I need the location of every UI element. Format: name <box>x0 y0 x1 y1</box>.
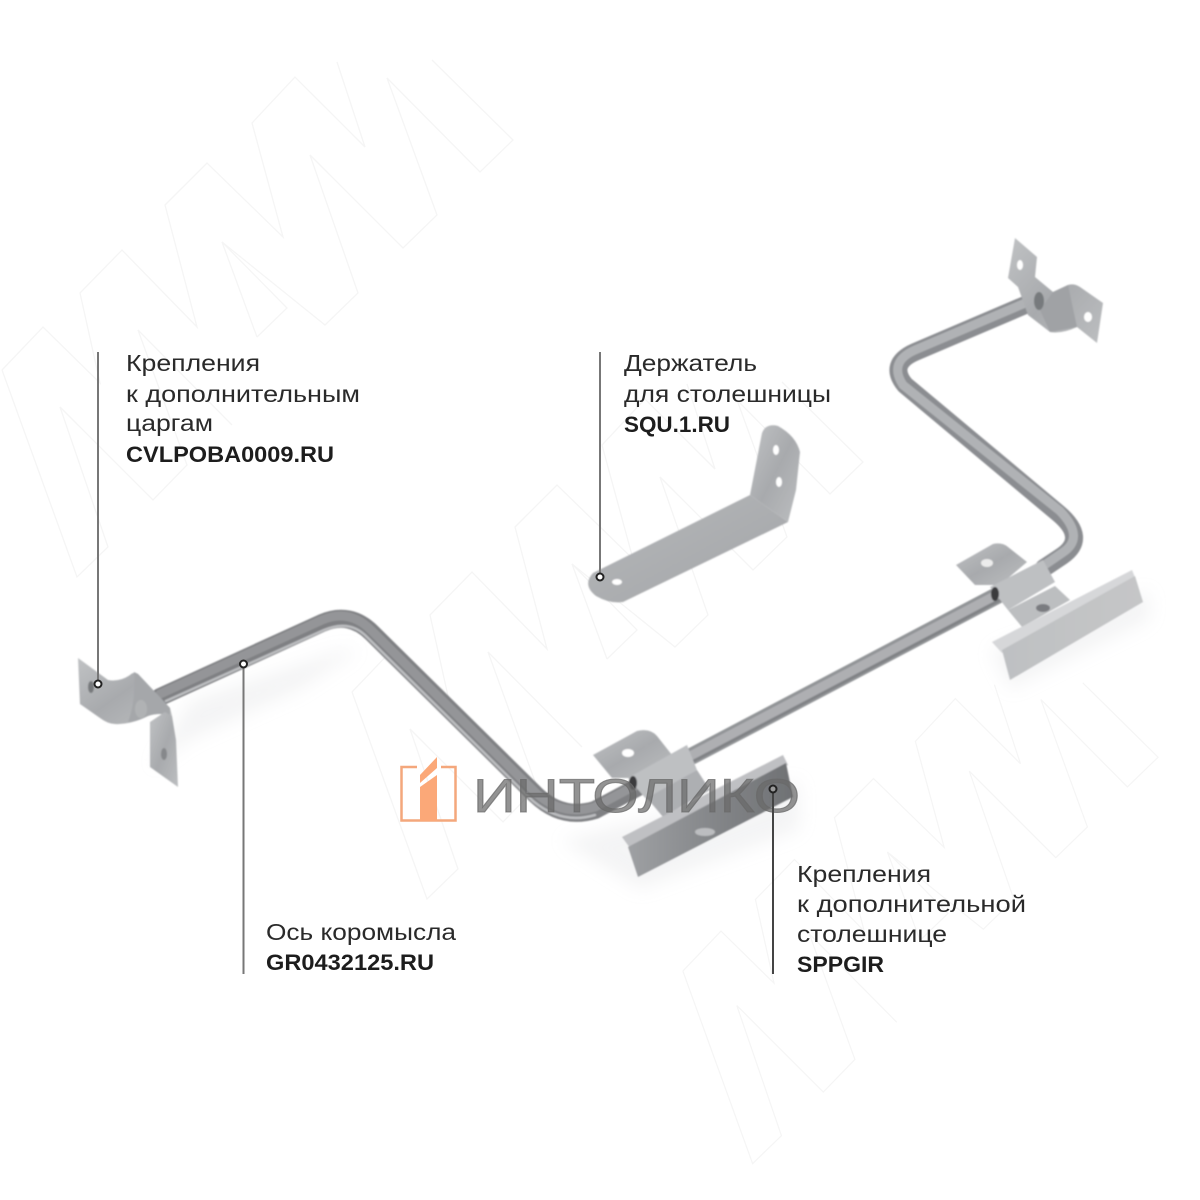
callout: rocker axle: GR0432125.RU <box>266 950 434 975</box>
callout: extra tabletop mounts: Крепления <box>797 861 931 887</box>
callout: tabletop holder: SQU.1.RU <box>624 412 730 437</box>
right clamp <box>956 543 1070 627</box>
callout: tabletop holder: Держатель <box>624 350 757 376</box>
watermark pattern: centre <box>352 382 863 899</box>
right mounting strip <box>992 570 1143 680</box>
product photo: rocker axle assembly <box>78 238 1150 890</box>
callout: extra tabletop mounts: к дополнительной <box>797 891 1026 917</box>
centre mounting strip <box>622 755 793 877</box>
callout: rocker axle: Ось коромысла <box>266 919 456 945</box>
logo: brand watermark <box>402 757 800 822</box>
callout: tabletop holder: для столешницы <box>624 381 831 407</box>
rod: rocker axle <box>160 298 1074 818</box>
callout: rocker axle <box>240 660 456 975</box>
centre clamp <box>593 730 710 817</box>
left wall bracket <box>78 658 178 787</box>
logo: brand watermark: ИНТОЛИКО <box>473 769 800 822</box>
right wall bracket <box>1008 238 1103 343</box>
soft shadows <box>150 590 1150 890</box>
callout: wall-bracket mounts: к дополнительным <box>126 381 360 407</box>
callout: tabletop holder <box>596 350 831 580</box>
callout: wall-bracket mounts: Крепления <box>126 350 260 376</box>
callout: extra tabletop mounts: SPPGIR <box>797 952 884 977</box>
table holder bracket <box>588 425 800 602</box>
watermark pattern: bottom right <box>683 683 1158 1164</box>
callout: wall-bracket mounts: CVLPOBA0009.RU <box>126 442 334 467</box>
callout: extra tabletop mounts: столешнице <box>797 921 947 947</box>
watermark pattern: top left <box>2 60 513 577</box>
callout: wall-bracket mounts: царгам <box>126 410 213 436</box>
callout: extra tabletop mounts <box>770 786 1026 977</box>
callout: wall-bracket mounts <box>94 350 360 688</box>
